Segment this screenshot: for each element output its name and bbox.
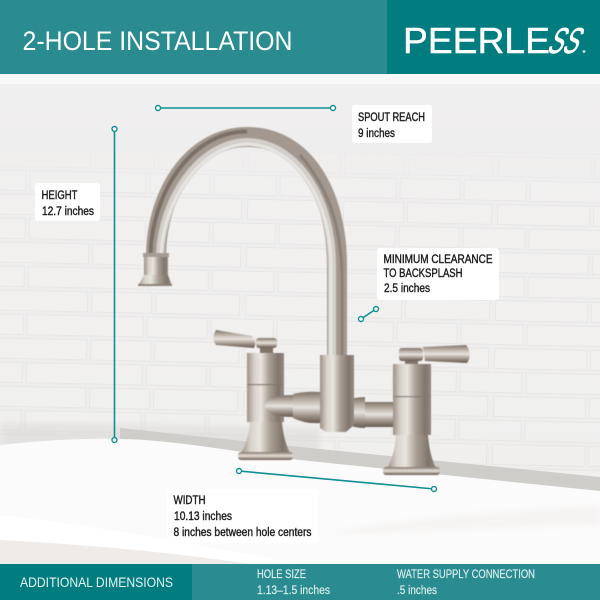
hole size: HOLE SIZE [257,569,306,581]
footer heading: ADDITIONAL DIMENSIONS [20,574,173,590]
dimension line: height [112,126,117,442]
title: 2-HOLE INSTALLATION [22,26,292,56]
label: spout reach [352,105,432,143]
spout nozzle [138,253,172,286]
label: minimum clearance: MINIMUM CLEARANCE [384,254,493,266]
label: width [167,489,318,543]
label: width: 8 inches between hole centers [174,527,312,539]
label: spout reach: 9 inches [358,128,395,140]
dimension line: spout reach [156,106,336,110]
bridge pipes [265,392,394,428]
faucet [138,132,470,475]
logo: Peerless: PEERLE [403,20,550,61]
dimension line: width [236,468,436,492]
footer band [0,564,600,600]
left handle [214,330,293,460]
sink counter [0,428,600,564]
header band [0,0,600,74]
dimension line: clearance [358,306,378,322]
right handle [383,345,470,475]
label: spout reach: SPOUT REACH [358,112,425,124]
water supply connection: .5 inches [397,585,437,597]
label: height: HEIGHT [42,190,78,202]
label: height [35,183,100,221]
hole size [257,569,330,597]
label: minimum clearance: TO BACKSPLASH [384,268,462,280]
label: width: WIDTH [174,495,206,507]
label: height: 12.7 inches [42,206,94,218]
label: minimum clearance: 2.5 inches [384,283,430,295]
water supply connection: WATER SUPPLY CONNECTION [397,569,535,581]
spout arch [150,132,342,355]
hole size: 1.13–1.5 inches [257,585,330,597]
label: minimum clearance [377,248,499,300]
label: width: 10.13 inches [174,511,232,523]
centre body [320,355,354,432]
water supply connection [397,569,535,597]
